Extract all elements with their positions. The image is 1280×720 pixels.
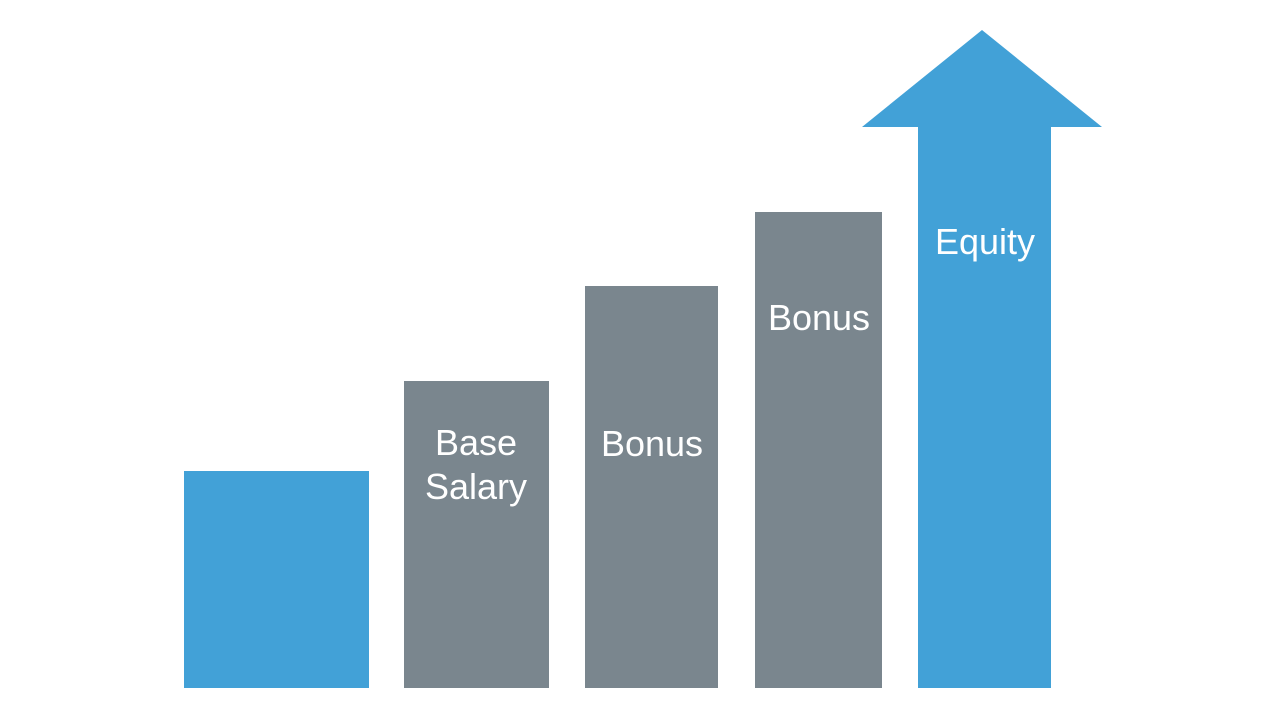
arrow: Equity xyxy=(862,30,1102,688)
bar: Base Salary: Salary xyxy=(425,466,527,507)
bar: Bonus (first) xyxy=(585,286,718,688)
arrow: Equity: Equity xyxy=(935,221,1035,262)
bar: blue base block xyxy=(184,471,369,688)
bar: Base Salary xyxy=(404,381,549,688)
bar: Bonus (second): Bonus xyxy=(768,297,870,338)
bar: Bonus (second) xyxy=(755,212,882,688)
bar: Bonus (first): Bonus xyxy=(601,423,703,464)
bar: Base Salary: Base xyxy=(435,422,517,463)
